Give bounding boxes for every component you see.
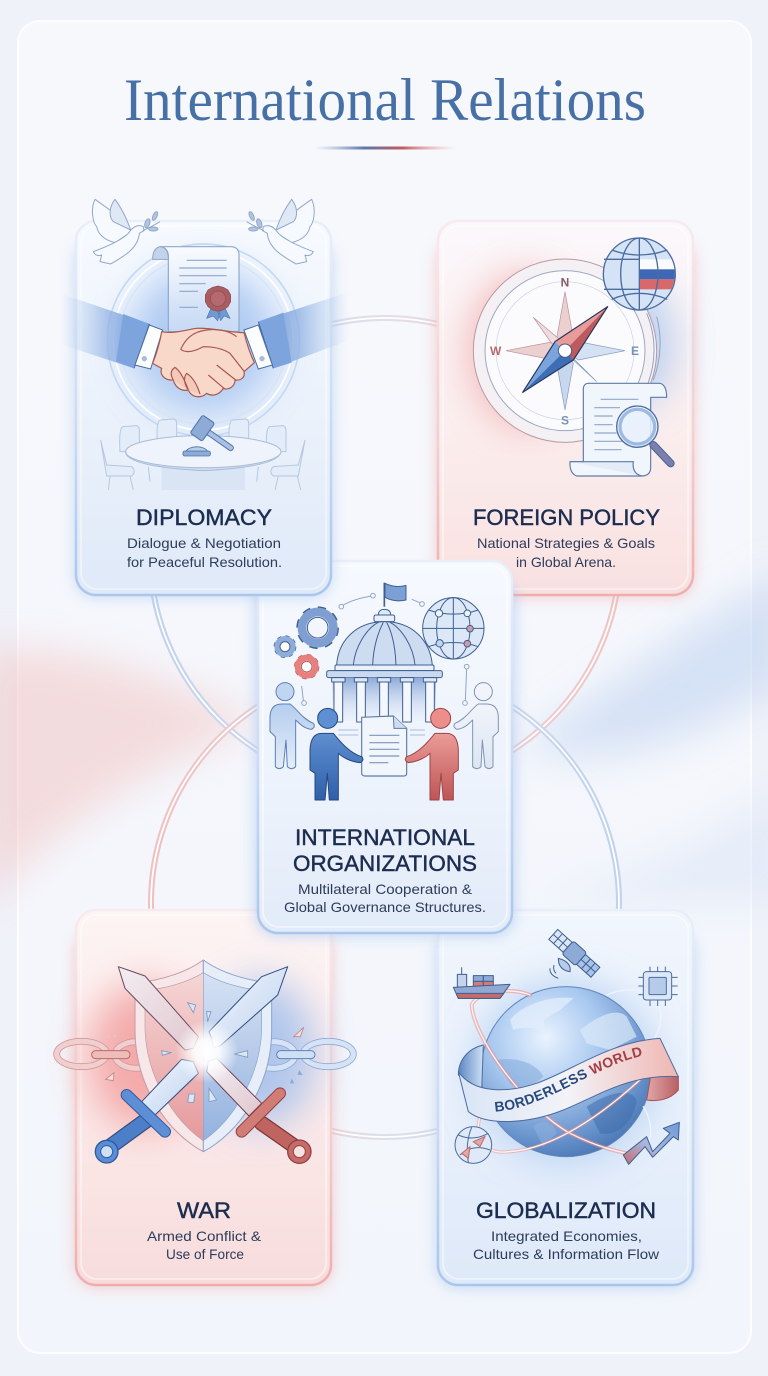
icon: suit sleeves	[60, 292, 350, 369]
icon: globe	[481, 987, 651, 1157]
card: war	[54, 910, 356, 1288]
heading: foreign policy: FOREIGN POLICY	[473, 505, 660, 530]
text: diplomacy description: for Peaceful Resolution.	[127, 554, 282, 570]
icon: compass: E	[631, 344, 639, 358]
icon: compass: N	[561, 275, 569, 289]
heading: international organizations	[293, 825, 477, 876]
icon: cargo ship	[453, 967, 510, 998]
connecting rings	[150, 318, 620, 1137]
text: war description	[147, 1228, 262, 1262]
heading: diplomacy: DIPLOMACY	[136, 505, 272, 530]
heading: international organizations: INTERNATIONAL	[295, 825, 475, 850]
card: foreign policy	[436, 221, 695, 598]
icon: treaty document	[153, 247, 239, 332]
text: diplomacy description	[127, 535, 282, 570]
heading: war: WAR	[177, 1198, 231, 1223]
text: organizations description: Multilateral Cooperation &	[298, 881, 473, 897]
icon: microchip	[638, 967, 678, 1006]
text: foreign policy description: in Global Arena.	[516, 554, 616, 570]
icon: globe with borderless world ribbon	[452, 928, 680, 1177]
card: globalization	[430, 908, 701, 1294]
icon: growth arrow	[623, 1122, 679, 1164]
icon: shield	[135, 960, 272, 1152]
icon: handshake, treaty, doves and table	[60, 199, 350, 490]
background washes	[0, 570, 768, 910]
text: organizations description	[284, 881, 486, 915]
text: foreign policy description	[477, 535, 655, 570]
card: diplomacy	[60, 199, 350, 598]
text: war description: Armed Conflict &	[147, 1228, 262, 1244]
icon: scroll and magnifier	[570, 383, 671, 476]
title: International Relations	[124, 67, 646, 133]
icon: gears	[276, 610, 335, 677]
icon: compass	[473, 259, 660, 442]
icon: shield, crossed swords, broken chains	[54, 960, 356, 1163]
icon: impact burst and shards	[106, 1003, 304, 1103]
icon: globe with flag	[603, 238, 675, 310]
icon: compass: W	[490, 344, 502, 358]
icon: red delegate	[405, 708, 458, 800]
icon: document	[362, 716, 407, 776]
text: ribbon label: BORDERLESS WORLD	[494, 1048, 642, 1112]
connector lines	[302, 593, 469, 705]
icon: swords	[95, 967, 311, 1163]
orbit lines	[472, 990, 661, 1153]
text: foreign policy description: National Strategies & Goals	[477, 535, 655, 551]
text: diplomacy description: Dialogue & Negotiation	[127, 535, 281, 551]
icon: compass, flag globe, policy scroll	[470, 238, 675, 476]
icon: compass: S	[561, 413, 569, 427]
icon: blue delegate	[310, 708, 363, 800]
icon: small network globe	[455, 1127, 492, 1163]
heading: globalization: GLOBALIZATION	[476, 1198, 656, 1223]
text: globalization description: Integrated Economies,	[491, 1228, 642, 1244]
icon: white delegate	[454, 683, 498, 769]
icon: broken chains	[54, 1038, 356, 1071]
icon: negotiation table and gavel	[101, 415, 305, 490]
title underline	[314, 146, 456, 150]
card: international organizations	[255, 561, 515, 936]
text: globalization description	[473, 1228, 660, 1262]
icon: peace doves	[92, 199, 160, 264]
text: war description: Use of Force	[166, 1246, 244, 1262]
icon: domed building	[327, 583, 442, 735]
icon: light blue delegate	[270, 683, 314, 769]
icon: clasped hands	[153, 328, 254, 397]
icon: network globe	[423, 598, 484, 659]
icon: institution building, gears, globe and people	[270, 583, 498, 800]
text: organizations description: Global Governance Structures.	[284, 899, 486, 915]
icon: satellite	[547, 928, 601, 979]
heading: international organizations: ORGANIZATIONS	[293, 851, 477, 876]
text: globalization description: Cultures & Information Flow	[473, 1246, 660, 1262]
icon: ribbon banner	[458, 1038, 693, 1122]
